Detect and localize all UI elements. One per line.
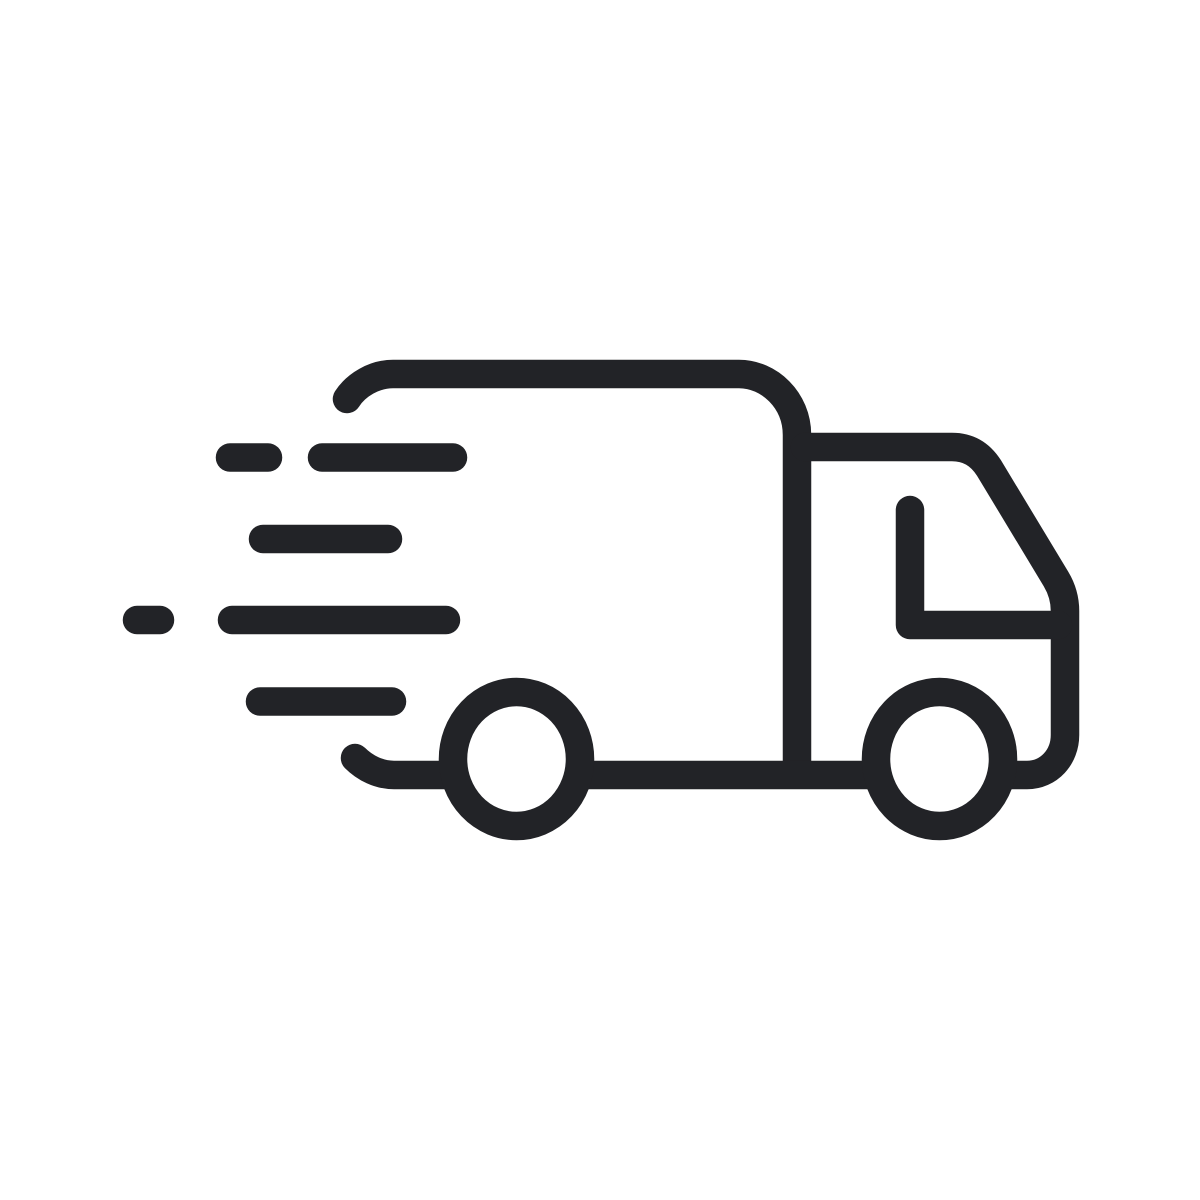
rear wheel bbox=[453, 692, 580, 826]
cab window bbox=[910, 510, 1058, 625]
cargo box lower rear curve bbox=[355, 758, 452, 775]
chassis line bbox=[582, 761, 874, 789]
cargo box outline bbox=[347, 374, 797, 770]
front wheel bbox=[876, 692, 1003, 826]
cab outline bbox=[805, 447, 1065, 775]
speed lines bbox=[137, 458, 453, 702]
